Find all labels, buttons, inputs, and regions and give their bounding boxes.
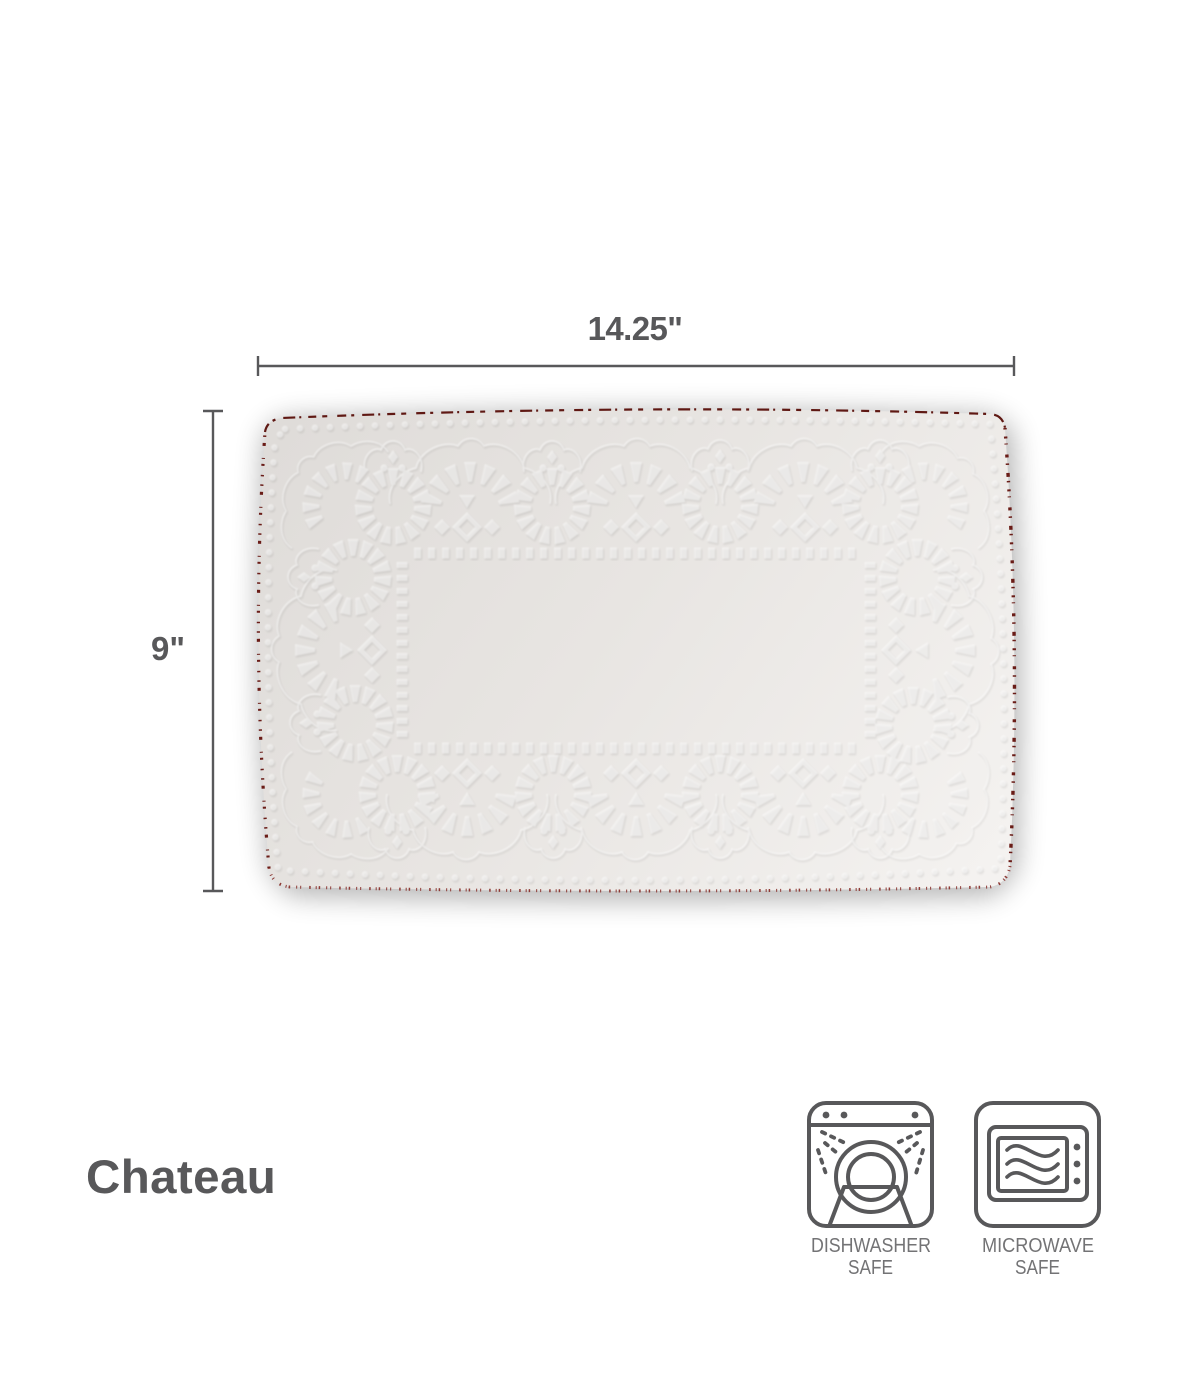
width bracket [258, 356, 1014, 376]
microwave icon [976, 1103, 1099, 1226]
dishwasher label: SAFE [848, 1257, 893, 1279]
icon: dishwasher safe [809, 1103, 932, 1279]
product name: Chateau [86, 1151, 276, 1204]
microwave label: SAFE [1015, 1257, 1060, 1279]
width dimension [258, 310, 1014, 376]
plate body [258, 409, 1014, 891]
height dimension [151, 411, 223, 891]
embossed lace pattern [252, 412, 1019, 889]
microwave label [982, 1235, 1094, 1279]
width label: 14.25" [588, 310, 682, 347]
dishwasher icon [809, 1103, 932, 1226]
red distressed rim [258, 409, 1014, 891]
microwave label: MICROWAVE [982, 1235, 1094, 1257]
centre panel [411, 561, 863, 739]
plate photo [252, 409, 1020, 900]
dishwasher label [811, 1235, 931, 1279]
dishwasher label: DISHWASHER [811, 1235, 931, 1257]
height label: 9" [151, 630, 185, 667]
height bracket [203, 411, 223, 891]
icon: microwave safe [976, 1103, 1099, 1279]
plate shadow [259, 411, 1020, 900]
